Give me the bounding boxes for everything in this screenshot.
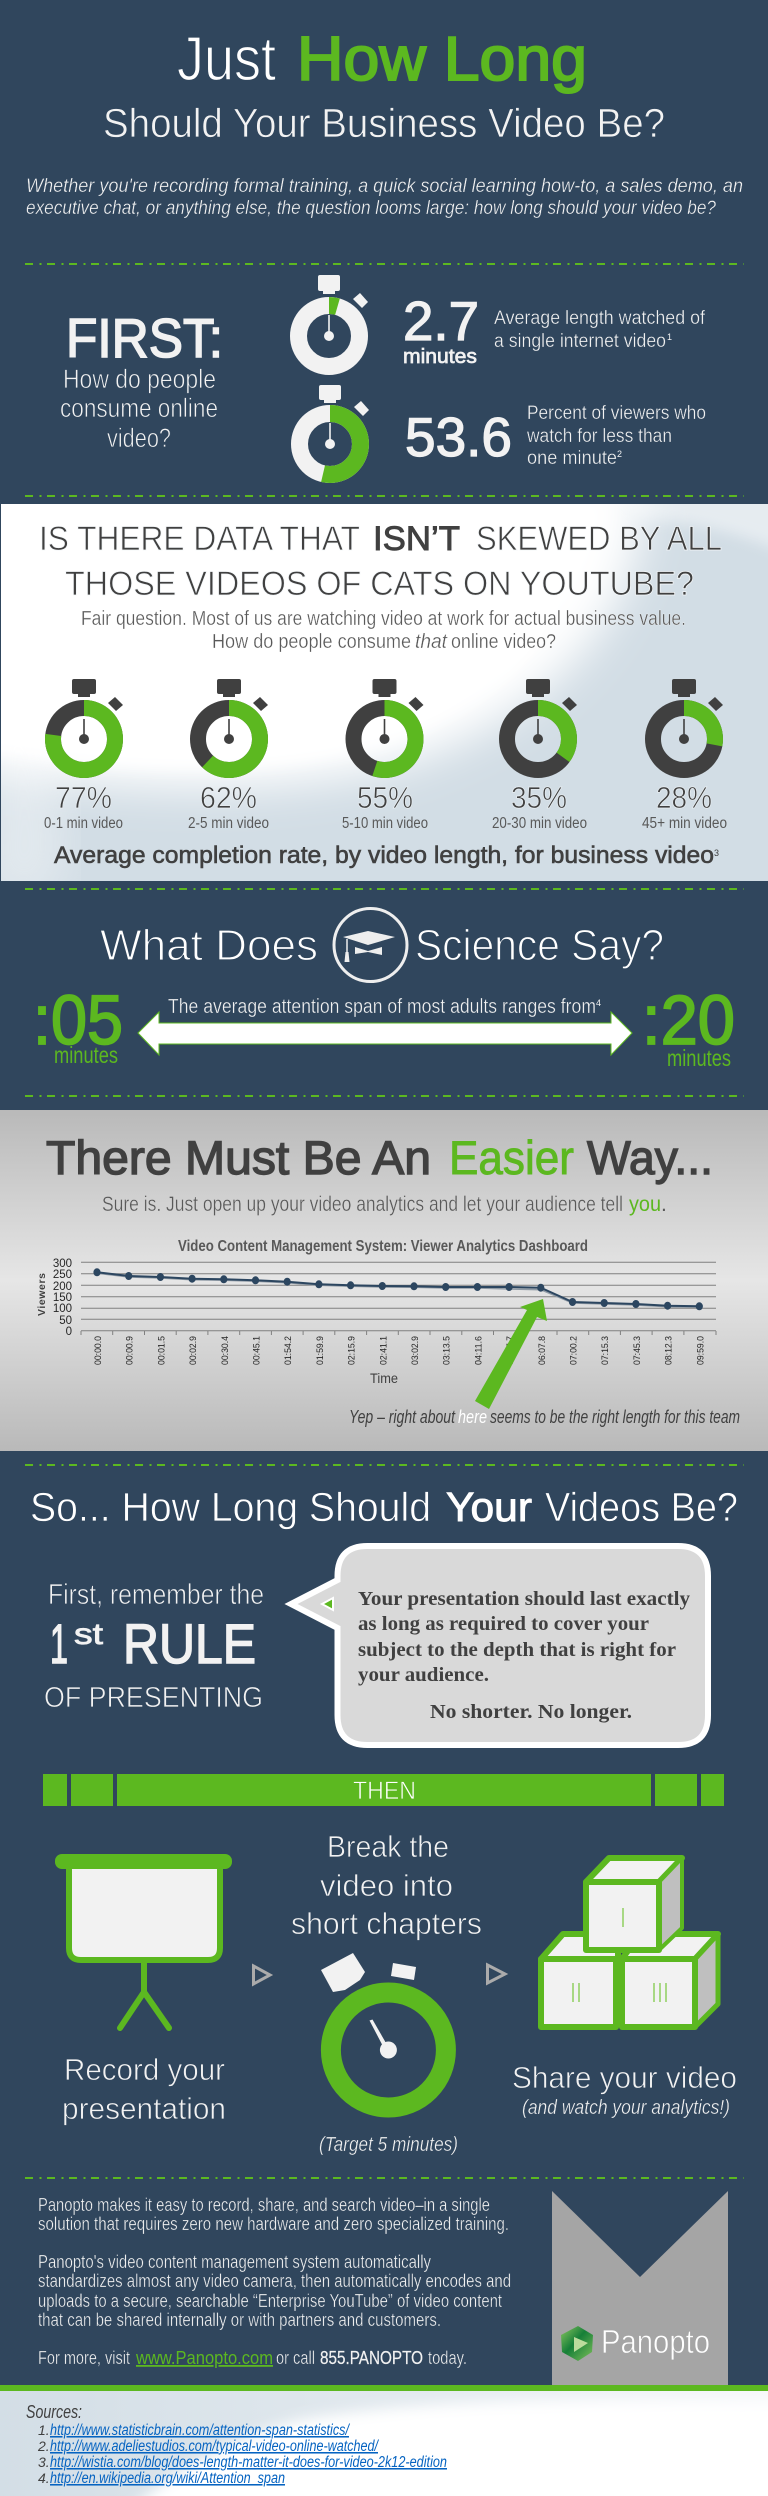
- subheading: [81, 608, 686, 653]
- stat: 53.6: 53.6: [405, 406, 512, 468]
- panel background: [1, 504, 768, 881]
- x axis labels: 07:00.2: [568, 1336, 580, 1365]
- heading: Your: [446, 1484, 532, 1530]
- heading: There Must Be An: [46, 1131, 431, 1184]
- sources list: http://www.adeliestudios.com/typical-video-online-watched/: [50, 2438, 379, 2455]
- sources list: [37, 2422, 447, 2487]
- step: share: Share your video: [512, 2060, 737, 2095]
- green band: [0, 2385, 768, 2391]
- subheading: Fair question. Most of us are watching video at work for actual business value.: [81, 608, 686, 630]
- about text: or call: [276, 2348, 315, 2368]
- percent values: 55%: [357, 780, 413, 815]
- attention span text: The average attention span of most adults ranges from: [168, 995, 596, 1018]
- icon: stopwatch 62%: [198, 679, 268, 770]
- icon: panopto logo: [561, 2326, 593, 2361]
- heading: Way...: [587, 1131, 713, 1184]
- stat description 1: 1: [667, 332, 672, 342]
- then banner: [43, 1774, 724, 1806]
- heading: SKEWED BY ALL: [476, 520, 722, 558]
- sources list: 3.: [38, 2454, 50, 2470]
- y axis labels: 0: [66, 1326, 72, 1338]
- question text: [60, 364, 218, 453]
- sources background: [0, 2391, 768, 2496]
- annotation: here: [458, 1407, 487, 1427]
- heading: [39, 520, 722, 603]
- about text: Panopto makes it easy to record, share, and search video–in a single: [38, 2195, 490, 2215]
- roman numerals: [573, 1908, 666, 2002]
- x axis labels: 04:11.6: [473, 1336, 484, 1365]
- icon: stopwatch 53.6: [300, 385, 369, 474]
- x axis labels: 04:37.7: [505, 1336, 516, 1365]
- first rule text: First, remember the: [48, 1579, 264, 1611]
- percent values: 62%: [200, 780, 257, 815]
- icon: big stopwatch: [321, 1953, 446, 2108]
- callout: [291, 1546, 708, 1745]
- about text: today.: [428, 2348, 467, 2368]
- stat: 2.7 minutes: 2.7: [403, 290, 479, 352]
- value: 20 minutes: minutes: [667, 1045, 731, 1071]
- y axis labels: 300: [53, 1258, 72, 1270]
- x axis labels: 00:45.1: [252, 1336, 262, 1365]
- panel: how long should your videos be: [30, 1484, 738, 2156]
- icon: stopwatch 28%: [653, 679, 723, 770]
- about text: For more, visit: [38, 2348, 130, 2368]
- first rule text: st: [74, 1618, 104, 1651]
- logo wordmark: Panopto: [601, 2323, 710, 2360]
- icon: graduation cap: [334, 908, 407, 982]
- heading: THOSE VIDEOS OF CATS ON YOUTUBE?: [65, 565, 694, 603]
- cube III: [622, 1934, 718, 2027]
- annotation: [349, 1407, 740, 1427]
- heading: What Does: [100, 921, 318, 970]
- stat description 1: Average length watched of: [494, 308, 706, 329]
- icon: arrow 2: [488, 1965, 505, 1983]
- step: break: video into: [320, 1868, 453, 1903]
- x axis labels: 03:02.9: [410, 1336, 421, 1365]
- stat description 2: Percent of viewers who: [527, 403, 706, 424]
- icon: projector screen: [55, 1854, 232, 2028]
- icon: chapter cubes: [541, 1858, 718, 2027]
- question text: consume online: [60, 393, 218, 423]
- y axis labels: 200: [53, 1281, 72, 1293]
- video length labels: 45+ min video: [642, 815, 727, 832]
- stat description 2: 2: [617, 449, 622, 459]
- logo ribbon: [552, 2191, 728, 2385]
- about text: Panopto's video content management system automatically: [38, 2252, 431, 2272]
- percent values: 28%: [656, 780, 712, 815]
- heading: IS THERE DATA THAT: [39, 520, 360, 558]
- cube II: [541, 1934, 618, 2027]
- x axis labels: 02:41.1: [378, 1336, 389, 1365]
- question text: How do people: [63, 364, 216, 394]
- panel: easier way: [0, 1110, 768, 1451]
- x axis labels: 00:02.9: [188, 1336, 199, 1365]
- video length labels: 20-30 min video: [492, 815, 587, 832]
- x axis labels: 03:13.5: [442, 1336, 453, 1365]
- callout text: your audience.: [358, 1664, 489, 1686]
- step: break: Break the: [327, 1829, 449, 1864]
- video length labels: [44, 815, 727, 832]
- stat description 2: watch for less than: [526, 426, 672, 447]
- x axis labels: 07:15.3: [600, 1336, 611, 1365]
- chart caption: Average completion rate, by video length, for business video: [54, 842, 714, 869]
- cube I: [586, 1858, 682, 1950]
- chart caption: 3: [714, 848, 719, 858]
- x axis labels: 00:01.5: [156, 1336, 167, 1365]
- x axis labels: 00:00.9: [125, 1336, 136, 1365]
- about text: standardizes almost any video camera, then automatically encodes and: [38, 2271, 511, 2291]
- percent values: 35%: [511, 780, 567, 815]
- panel: first: [60, 275, 706, 474]
- icon: stopwatch 35%: [507, 679, 577, 770]
- subheading: you: [629, 1193, 661, 1216]
- arrow: double headed: [138, 1012, 632, 1055]
- y axis labels: 50: [59, 1315, 72, 1327]
- subheading: How do people consume: [212, 631, 411, 653]
- panel: what does science say: [33, 908, 735, 1071]
- callout text: subject to the depth that is right for: [358, 1639, 676, 1661]
- icon: stopwatch 77%: [53, 679, 123, 770]
- chart: viewer analytics: [36, 1238, 716, 1386]
- callout text: No shorter. No longer.: [430, 1701, 632, 1723]
- sources heading: Sources:: [26, 2402, 82, 2422]
- sources list: 2.: [37, 2438, 50, 2454]
- stat description 1: a single internet video: [494, 331, 666, 352]
- stat description 2: one minute: [527, 448, 617, 469]
- x axis labels: 00:30.4: [220, 1336, 231, 1365]
- step: record: Record your: [64, 2052, 225, 2087]
- step: record: [62, 2052, 226, 2126]
- stat: 2.7 minutes: minutes: [403, 346, 477, 368]
- sources list: http://en.wikipedia.org/wiki/Attention_span: [50, 2470, 285, 2487]
- stat description 2: [526, 403, 706, 469]
- attention span text: 4: [596, 998, 601, 1008]
- percent values: 77%: [55, 780, 112, 815]
- title: Should Your Business Video Be?: [103, 100, 665, 146]
- first rule text: OF PRESENTING: [44, 1682, 263, 1714]
- video length labels: 0-1 min video: [44, 815, 123, 832]
- y axis labels: 250: [53, 1269, 72, 1281]
- callout text: [358, 1588, 690, 1723]
- about text: solution that requires zero new hardware and zero specialized training.: [38, 2214, 509, 2234]
- subheading: Sure is. Just open up your video analytics and let your audience tell: [102, 1193, 623, 1216]
- video length labels: 5-10 min video: [342, 815, 428, 832]
- title: [103, 25, 665, 146]
- step: break: short chapters: [291, 1906, 482, 1941]
- chart title: Video Content Management System: Viewer Analytics Dashboard: [178, 1238, 588, 1255]
- target caption: (Target 5 minutes): [319, 2134, 458, 2156]
- first rule text: 1: [50, 1612, 68, 1675]
- icon: arrow 1: [254, 1966, 270, 1984]
- step: record: presentation: [62, 2091, 226, 2126]
- x axis labels: 09:59.0: [695, 1336, 706, 1365]
- heading: Easier: [449, 1131, 574, 1184]
- about text: uploads to a secure, searchable “Enterprise YouTube” of video content: [38, 2291, 502, 2311]
- arrow: pointing to drop-off: [475, 1299, 547, 1409]
- title: Just: [177, 25, 276, 94]
- value: 20 minutes: :20: [642, 981, 735, 1059]
- subheading: .: [661, 1193, 667, 1216]
- intro text: [26, 175, 743, 219]
- heading: Science Say?: [415, 921, 664, 970]
- x axis labels: 00:00.0: [93, 1336, 104, 1365]
- video length labels: 2-5 min video: [188, 815, 269, 832]
- heading: So... How Long Should: [30, 1484, 431, 1530]
- y axis labels: [53, 1258, 72, 1338]
- sources list: 1.: [38, 2422, 50, 2438]
- subheading: that: [415, 631, 448, 653]
- x axis labels: [93, 1336, 706, 1365]
- x axis labels: 02:15.9: [347, 1336, 358, 1365]
- x axis labels: 07:45.3: [632, 1336, 643, 1365]
- callout text: as long as required to cover your: [358, 1613, 649, 1635]
- about text: www.Panopto.com: [135, 2348, 273, 2368]
- heading: first: FIRST:: [66, 307, 223, 369]
- about text: 855.PANOPTO: [320, 2348, 423, 2368]
- heading: [100, 921, 664, 970]
- step: share: (and watch your analytics!): [522, 2097, 730, 2119]
- annotation: Yep – right about: [349, 1407, 456, 1427]
- step: break: [291, 1829, 482, 1941]
- subheading: online video?: [451, 631, 556, 653]
- y axis labels: 100: [53, 1303, 72, 1315]
- first rule text: [44, 1579, 264, 1714]
- title: How Long: [297, 25, 587, 94]
- stat description 1: [494, 308, 706, 352]
- sources list: http://wistia.com/blog/does-length-matter-it-does-for-video-2k12-edition: [50, 2454, 447, 2471]
- heading: ISN’T: [373, 520, 460, 558]
- heading: [30, 1484, 738, 1530]
- x axis title: Time: [370, 1371, 398, 1386]
- icon: stopwatch 2.7: [298, 275, 368, 366]
- panel: business video data: [1, 504, 768, 881]
- about text: that can be shared internally or with partners and customers.: [38, 2310, 441, 2330]
- panel background: [0, 1110, 768, 1451]
- panel: about panopto: [38, 2191, 728, 2385]
- x axis labels: 01:54.2: [283, 1336, 294, 1365]
- heading: Videos Be?: [545, 1484, 738, 1530]
- y axis title: Viewers: [36, 1273, 48, 1316]
- x axis labels: 06:07.8: [537, 1336, 548, 1365]
- question text: video?: [107, 423, 171, 453]
- icon: stopwatch 55%: [354, 679, 424, 770]
- x axis labels: 08:12.3: [664, 1336, 675, 1365]
- sources list: 4.: [38, 2470, 50, 2486]
- first rule text: RULE: [123, 1612, 256, 1675]
- value: 5 minutes: :05: [33, 981, 123, 1059]
- panel: sources: [0, 2391, 768, 2496]
- percent values: [55, 780, 712, 815]
- sources list: http://www.statisticbrain.com/attention-span-statistics/: [50, 2422, 350, 2439]
- x axis labels: 01:59.9: [315, 1336, 326, 1365]
- value: 5 minutes: minutes: [54, 1042, 118, 1068]
- then banner: THEN: [353, 1777, 416, 1805]
- y axis labels: 150: [53, 1292, 72, 1304]
- icon: green pointer: [322, 1598, 333, 1610]
- callout text: Your presentation should last exactly: [358, 1588, 690, 1610]
- data line: [93, 1268, 703, 1310]
- heading: [46, 1131, 713, 1184]
- step: share: [512, 2060, 737, 2119]
- about text: [38, 2195, 511, 2368]
